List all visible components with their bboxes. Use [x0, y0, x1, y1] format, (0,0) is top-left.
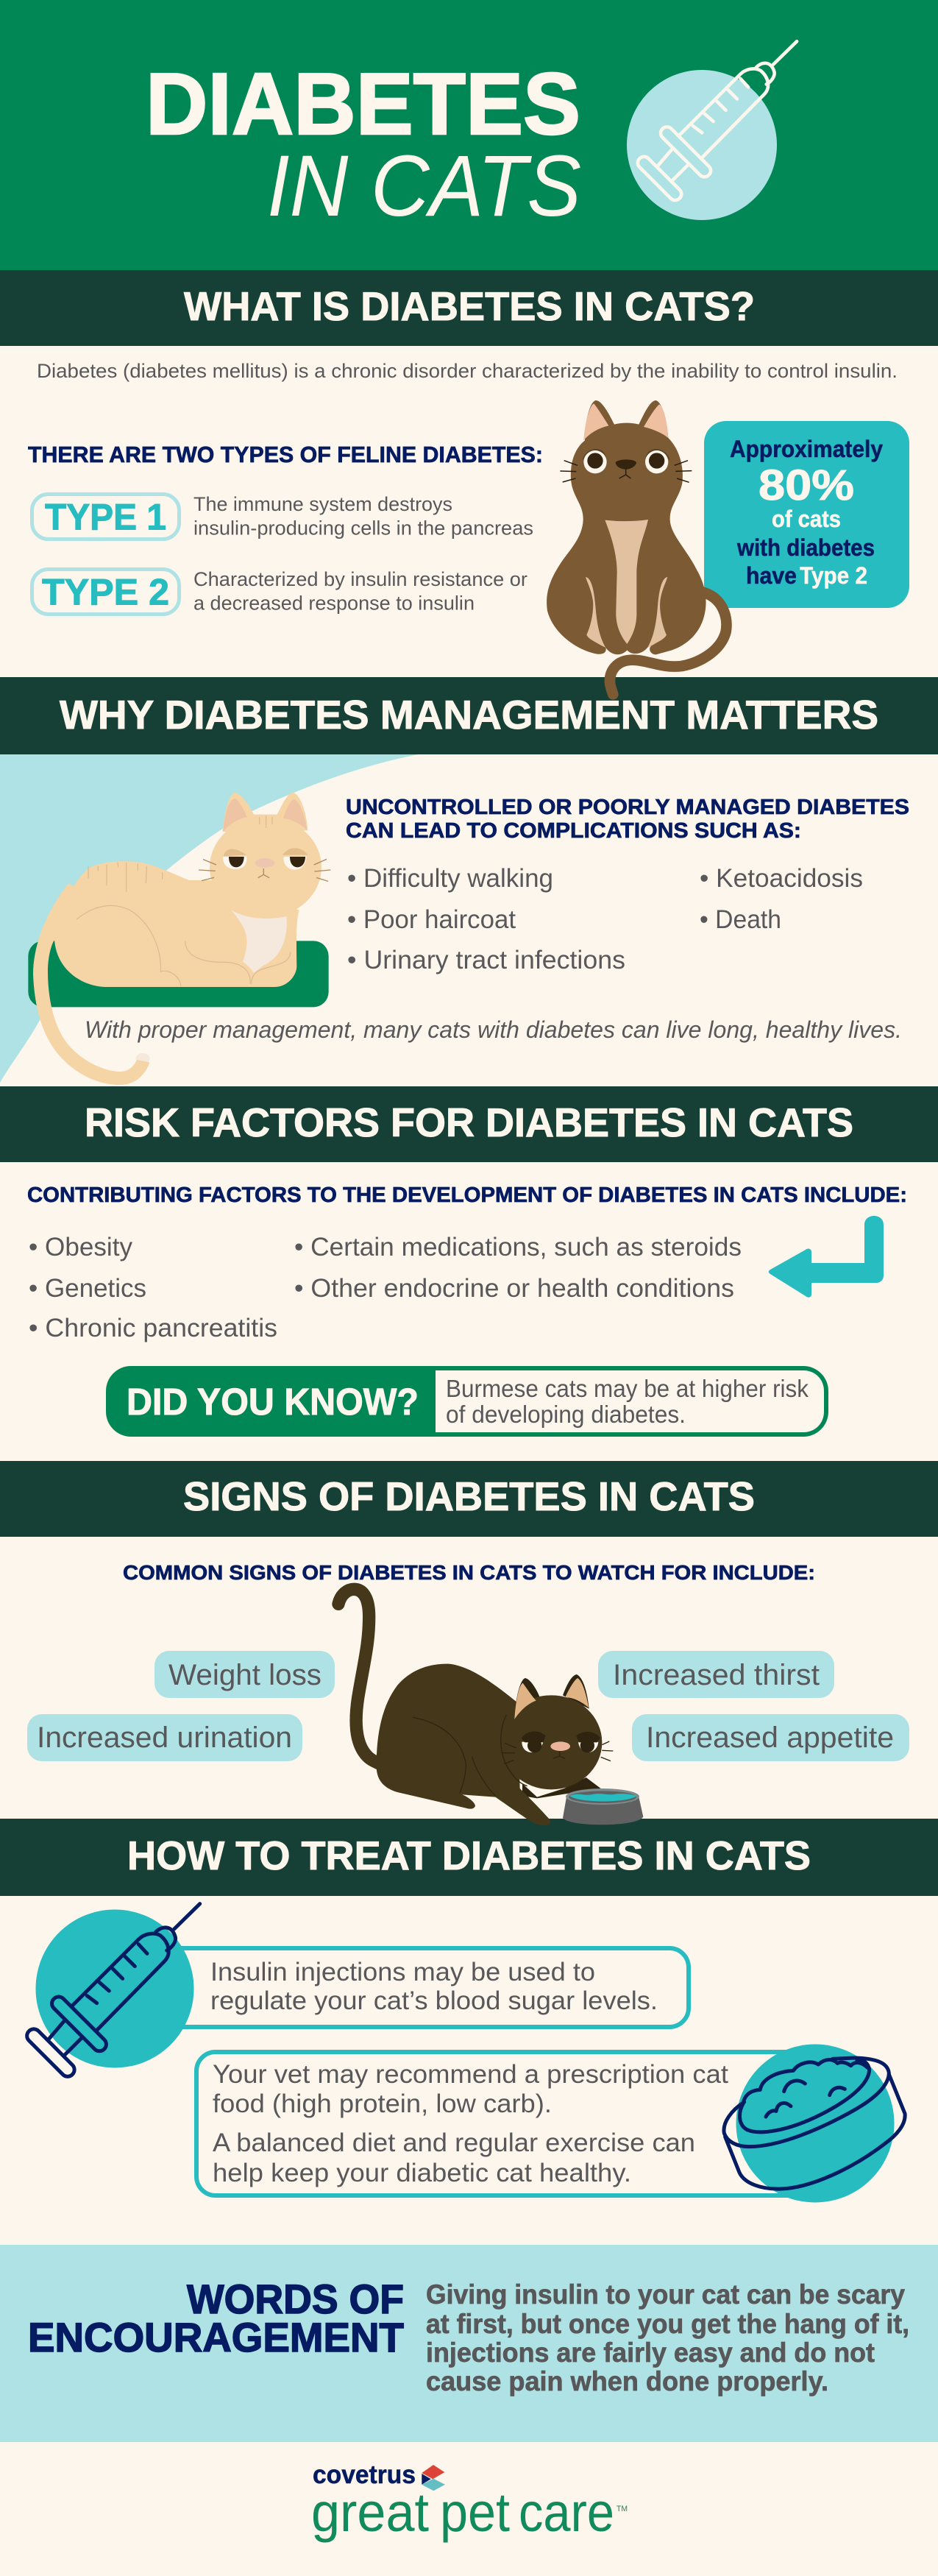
callout: 80 percent — [704, 421, 909, 608]
logo: covetrus: covetrus — [313, 2460, 416, 2489]
panel: type 2: a decreased response to insulin — [193, 592, 475, 614]
subheading: complications — [346, 796, 909, 843]
list: complications: • Ketoacidosis — [700, 864, 863, 893]
logo: great pet care: TM — [617, 2505, 628, 2513]
logo: great pet care: great — [311, 2482, 429, 2543]
list: complications: • Difficulty walking — [347, 864, 553, 893]
title: in cats: IN CATS — [267, 138, 581, 235]
illustration: brown cat — [547, 400, 726, 694]
section heading: signs — [0, 1461, 938, 1537]
section heading: why management matters — [0, 677, 938, 754]
header panel — [0, 0, 938, 270]
callout: 80 percent: with diabetes — [736, 534, 875, 561]
text: encouragement: at first, but once you get the hang of it, — [426, 2309, 909, 2339]
subheading: complications: UNCONTROLLED OR POORLY MANAGED DIABETES — [346, 796, 909, 819]
pill: weight loss: Weight loss — [168, 1659, 321, 1691]
subheading: contributing factors: CONTRIBUTING FACTORS TO THE DEVELOPMENT OF DIABETES IN CATS INCLUDE: — [27, 1183, 907, 1207]
illustration: black cat with bowl — [338, 1589, 643, 1825]
panel: insulin injections: Insulin injections may be used to — [210, 1958, 595, 1986]
section heading: what is diabetes: WHAT IS DIABETES IN CATS? — [184, 283, 755, 329]
text: encouragement: Giving insulin to your cat can be scary — [426, 2279, 905, 2310]
pill: increased thirst — [598, 1651, 834, 1698]
intro text: Diabetes (diabetes mellitus) is a chronic disorder characterized by the inability to control insulin. — [37, 360, 898, 382]
callout: 80 percent: Type 2 — [800, 562, 867, 589]
callout: 80 percent: have — [746, 562, 797, 589]
section heading: signs: SIGNS OF DIABETES IN CATS — [183, 1473, 755, 1519]
icon: syringe — [24, 1904, 200, 2079]
list: complications — [347, 864, 863, 974]
subheading: complications: CAN LEAD TO COMPLICATIONS SUCH AS: — [346, 819, 801, 843]
section heading: risk factors — [0, 1086, 938, 1162]
list: risk factors: • Chronic pancreatitis — [29, 1314, 277, 1342]
text: encouragement — [426, 2279, 909, 2396]
panel: type 2 — [32, 568, 527, 614]
text: encouragement: cause pain when done properly. — [426, 2366, 828, 2396]
list: risk factors: • Obesity — [29, 1233, 132, 1262]
callout: did you know: Burmese cats may be at higher risk — [446, 1375, 809, 1402]
heading: words of encouragement — [28, 2276, 404, 2360]
list: complications: • Poor haircoat — [347, 905, 516, 934]
list: risk factors — [29, 1233, 742, 1342]
callout: 80 percent: of cats — [772, 506, 841, 532]
callout: 80 percent: Approximately — [730, 436, 883, 462]
panel: diet advice — [196, 2052, 807, 2195]
callout: did you know: of developing diabetes. — [446, 1401, 686, 1428]
callout: did you know — [106, 1366, 828, 1437]
subheading: two types: THERE ARE TWO TYPES OF FELINE DIABETES: — [28, 442, 543, 467]
logo: great pet care — [311, 2482, 628, 2543]
section heading: what is diabetes — [0, 270, 938, 346]
section heading: why management matters: WHY DIABETES MANAGEMENT MATTERS — [60, 692, 878, 737]
pill: increased appetite: Increased appetite — [646, 1722, 894, 1754]
background swoosh — [0, 754, 419, 1083]
heading: words of encouragement: WORDS OF — [187, 2276, 404, 2322]
panel: insulin injections — [154, 1948, 689, 2027]
list: complications: • Death — [700, 905, 781, 934]
icon: food bowl — [724, 2058, 905, 2189]
icon: food bowl circle — [736, 2045, 895, 2202]
panel: type 2: Characterized by insulin resistance or — [193, 568, 527, 590]
list: risk factors: • Certain medications, such as steroids — [294, 1233, 742, 1262]
heading: words of encouragement: ENCOURAGEMENT — [28, 2314, 404, 2360]
pill: increased urination: Increased urination — [37, 1722, 292, 1754]
arrow — [769, 1216, 884, 1298]
pill: weight loss — [154, 1651, 335, 1698]
title: diabetes: DIABETES — [146, 55, 580, 153]
section heading: how to treat: HOW TO TREAT DIABETES IN CATS — [127, 1833, 811, 1878]
panel: diet advice: A balanced diet and regular exercise can — [213, 2129, 695, 2157]
section heading: how to treat — [0, 1819, 938, 1896]
panel: type 1 — [32, 493, 533, 539]
panel: diet advice: Your vet may recommend a prescription cat — [213, 2060, 728, 2089]
text: encouragement: injections are fairly easy and do not — [426, 2338, 875, 2368]
panel: type 2: TYPE 2 — [42, 571, 169, 612]
panel: type 1: The immune system destroys — [193, 493, 452, 515]
panel: diet advice: help keep your diabetic cat healthy. — [213, 2159, 631, 2187]
text: proper management: With proper management, many cats with diabetes can live long, healthy lives. — [85, 1016, 902, 1043]
list: risk factors: • Other endocrine or health conditions — [294, 1274, 734, 1303]
icon: header syringe — [635, 41, 797, 203]
list: complications: • Urinary tract infections — [347, 946, 625, 974]
icon: header syringe circle — [627, 70, 777, 220]
pill: increased urination — [27, 1714, 302, 1761]
subheading: common signs: COMMON SIGNS OF DIABETES IN CATS TO WATCH FOR INCLUDE: — [123, 1561, 815, 1584]
section heading: risk factors: RISK FACTORS FOR DIABETES IN CATS — [85, 1100, 853, 1145]
pill: increased thirst: Increased thirst — [613, 1659, 820, 1691]
panel: words of encouragement — [0, 2245, 938, 2442]
panel: type 1: TYPE 1 — [45, 496, 166, 537]
list: risk factors: • Genetics — [29, 1274, 146, 1303]
panel: diet advice: food (high protein, low carb). — [213, 2090, 552, 2118]
callout: 80 percent: 80% — [758, 461, 854, 509]
callout: did you know: DID YOU KNOW? — [127, 1381, 419, 1423]
pill: increased appetite — [632, 1714, 909, 1761]
panel: type 1: insulin-producing cells in the pancreas — [193, 517, 533, 539]
panel: insulin injections: regulate your cat’s blood sugar levels. — [210, 1986, 658, 2015]
illustration: orange cat on bed — [28, 793, 330, 1085]
logo: great pet care: pet — [440, 2482, 510, 2543]
logo: great pet care: care — [519, 2482, 614, 2543]
icon: syringe circle — [35, 1909, 194, 2068]
